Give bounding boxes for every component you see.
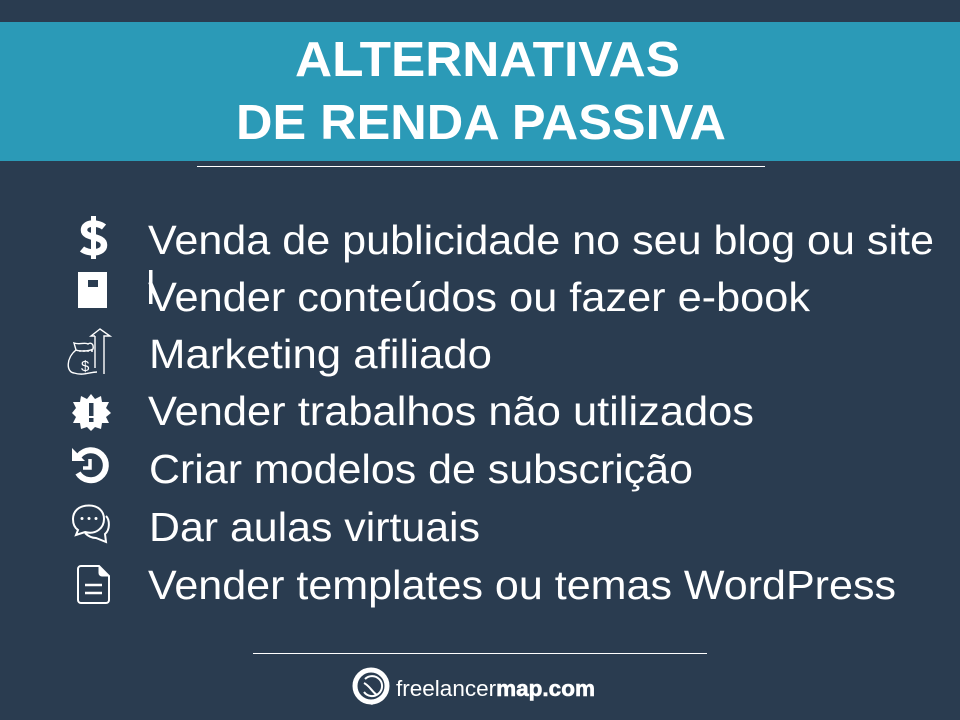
title: ALTERNATIVAS bbox=[295, 33, 680, 87]
icon: document bbox=[78, 566, 109, 603]
title banner bbox=[0, 22, 960, 161]
icon: book bbox=[78, 272, 107, 308]
icon: money bag with up arrow bbox=[68, 329, 110, 375]
item 7 text: Vender templates ou temas WordPress bbox=[148, 562, 896, 608]
item 2 text: Vender conteúdos ou fazer e-book bbox=[148, 274, 811, 320]
logo mark bbox=[355, 670, 387, 705]
icon: dollar sign bbox=[82, 216, 104, 259]
freelancermap logo bbox=[355, 670, 595, 705]
item 6 text: Dar aulas virtuais bbox=[149, 504, 480, 550]
text cursor mark bbox=[149, 270, 152, 304]
title bbox=[236, 33, 726, 150]
icon: warning badge bbox=[72, 394, 111, 431]
list of passive income alternatives bbox=[148, 217, 934, 608]
title: DE RENDA PASSIVA bbox=[236, 96, 726, 150]
logo wordmark: freelancermap.com bbox=[396, 676, 595, 701]
icon: speech bubbles bbox=[73, 506, 109, 542]
item 4 text: Vender trabalhos não utilizados bbox=[148, 388, 754, 434]
item 3 text: Marketing afiliado bbox=[149, 331, 492, 377]
item 5 text: Criar modelos de subscrição bbox=[149, 446, 693, 492]
icon: money bag with up arrow: $ bbox=[81, 358, 90, 375]
item 1 text: Venda de publicidade no seu blog ou site bbox=[148, 217, 934, 263]
icon: history clock bbox=[72, 448, 106, 480]
